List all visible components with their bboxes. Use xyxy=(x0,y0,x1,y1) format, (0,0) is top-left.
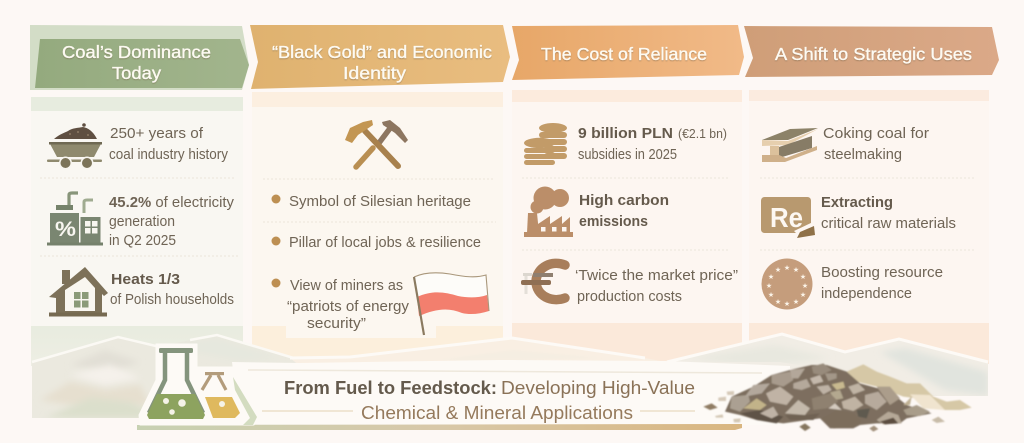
header: coal's dominance today: Coal’s Dominance xyxy=(62,42,211,62)
header: coal's dominance today xyxy=(30,25,249,90)
bullets list: Symbol of Silesian heritage xyxy=(289,193,471,210)
panel: strategic uses body xyxy=(749,90,989,364)
header: the cost of reliance: The Cost of Reliance xyxy=(541,44,707,64)
banner: from fuel to feedstock: From Fuel to Feedstock: xyxy=(284,378,497,398)
icon: eu stars coin: ★ xyxy=(775,266,781,274)
mountains: right xyxy=(667,334,988,396)
text: 250+ years: coal industry history xyxy=(109,146,228,163)
bullets list: View of miners as xyxy=(290,277,403,294)
dividers xyxy=(40,178,975,256)
text: extracting xyxy=(821,194,956,232)
mountains: left xyxy=(32,335,307,418)
text: coking coal xyxy=(823,125,929,163)
text: heats 1/3: of Polish households xyxy=(110,291,234,308)
text: high carbon: emissions xyxy=(579,213,648,230)
bullets list: Pillar of local jobs & resilience xyxy=(289,234,481,251)
banner: from fuel to feedstock xyxy=(137,360,790,430)
text: 9 billion PLN xyxy=(578,125,727,163)
icon: eu stars coin: ★ xyxy=(766,282,772,290)
icon: steel beam xyxy=(762,128,818,162)
icon: power plant with percent xyxy=(47,193,103,246)
icon: power plant with percent: % xyxy=(55,218,76,241)
text: boosting resource xyxy=(821,264,943,302)
header: black gold and economic identity: Identity xyxy=(343,63,406,83)
icon: eu stars coin: ★ xyxy=(784,264,790,272)
icon: mine cart with coal xyxy=(47,123,102,170)
text: 250+ years xyxy=(109,125,228,163)
icon: euro sign xyxy=(521,263,565,300)
icon: factory with smoke xyxy=(524,186,573,237)
icon: eu stars coin: ★ xyxy=(768,273,774,281)
icon: eu stars coin: ★ xyxy=(775,298,781,306)
text: extracting: critical raw materials xyxy=(821,215,956,232)
text: twice the market price: production costs xyxy=(577,288,682,305)
bullets list: “patriots of energy xyxy=(287,298,409,315)
header: a shift to strategic uses: A Shift to Strategic Uses xyxy=(775,44,972,64)
icon: pile of coal and minerals xyxy=(703,363,972,432)
panel: black gold body xyxy=(252,92,503,362)
panel: coal's dominance body xyxy=(31,97,243,366)
text: twice the market price xyxy=(575,267,738,305)
header: the cost of reliance xyxy=(512,25,744,80)
text: 9 billion PLN: 9 billion PLN xyxy=(578,125,673,142)
text: 250+ years: 250+ years of xyxy=(110,125,204,142)
text: 45.2% electricity: in Q2 2025 xyxy=(109,232,176,249)
text: extracting: Extracting xyxy=(821,194,893,211)
icon: chemistry flasks xyxy=(139,344,258,425)
text: heats 1/3: Heats 1/3 xyxy=(111,271,180,288)
icon: house xyxy=(49,267,108,316)
icon: eu stars coin: ★ xyxy=(768,291,774,299)
icon: eu stars coin: ★ xyxy=(800,273,806,281)
icon: coin stacks xyxy=(524,123,567,165)
bullets list: security” xyxy=(307,315,366,332)
icon: eu stars coin: ★ xyxy=(800,291,806,299)
header: coal's dominance today: Today xyxy=(112,63,161,83)
header: black gold and economic identity: “Black Gold” and Economic xyxy=(272,42,492,62)
header: black gold and economic identity xyxy=(250,25,510,89)
text: 9 billion PLN: subsidies in 2025 xyxy=(578,146,677,163)
icon: eu stars coin xyxy=(762,258,812,310)
text: high carbon: High carbon xyxy=(579,192,669,209)
bullets list xyxy=(272,193,481,332)
text: 45.2% electricity: 45.2% of electricity xyxy=(109,194,234,211)
icon: crossed hammers xyxy=(345,120,408,167)
mountains: centre ridge xyxy=(290,338,665,366)
text: heats 1/3 xyxy=(110,271,234,308)
text: 45.2% electricity: generation xyxy=(109,213,175,230)
icon: eu stars coin: ★ xyxy=(784,300,790,308)
banner: from fuel to feedstock: Chemical & Mineral Applications xyxy=(361,403,633,423)
icon: eu stars coin: ★ xyxy=(793,266,799,274)
text: boosting resource: independence xyxy=(821,285,912,302)
text: twice the market price: ‘Twice the market price” xyxy=(575,267,738,284)
header: a shift to strategic uses xyxy=(744,26,999,77)
text: boosting resource: Boosting resource xyxy=(821,264,943,281)
icon: rhenium element tile xyxy=(761,197,818,238)
text: coking coal: Coking coal for xyxy=(823,125,929,142)
icon: polish flag xyxy=(414,273,489,335)
text: 9 billion PLN: (€2.1 bn) xyxy=(678,126,727,141)
panel: cost of reliance body xyxy=(512,90,742,363)
text: coking coal: steelmaking xyxy=(824,146,902,163)
icon: eu stars coin: ★ xyxy=(793,298,799,306)
icon: rhenium element tile: Re xyxy=(770,202,803,233)
text: high carbon xyxy=(579,192,669,230)
text: 45.2% electricity xyxy=(109,194,234,249)
banner: from fuel to feedstock: Developing High-Value xyxy=(501,378,695,398)
icon: eu stars coin: ★ xyxy=(802,282,808,290)
